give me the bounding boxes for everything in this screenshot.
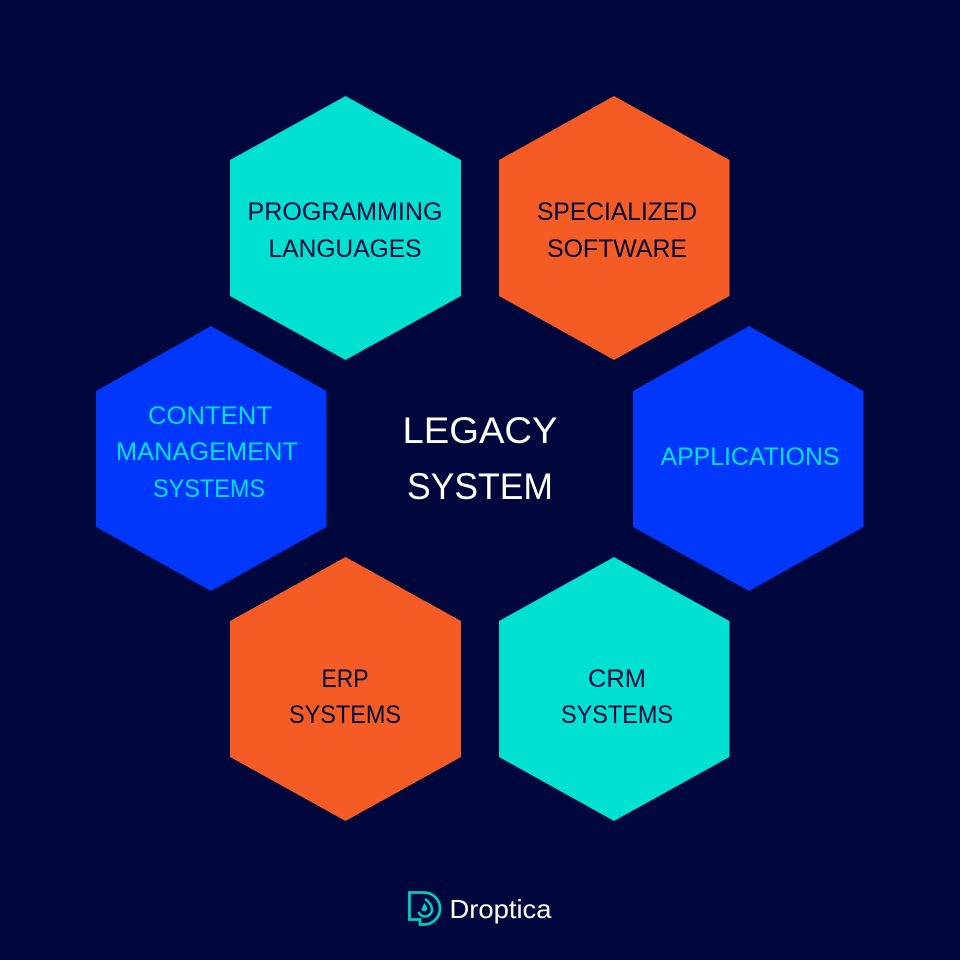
hexagon: specialized software: SPECIALIZED xyxy=(537,198,697,226)
hexagon: content management systems: CONTENT xyxy=(148,402,272,430)
hexagon: erp systems: SYSTEMS xyxy=(289,701,401,729)
hexagon: crm systems xyxy=(499,557,730,821)
logo: Droptica xyxy=(410,892,552,924)
hexagon: programming languages: PROGRAMMING xyxy=(248,198,442,226)
icon: droplet D mark xyxy=(410,892,440,924)
hexagon: programming languages: LANGUAGES xyxy=(268,235,422,263)
hexagon: specialized software: SOFTWARE xyxy=(547,235,687,263)
hexagon: applications: APPLICATIONS xyxy=(660,443,840,471)
hexagon: crm systems: SYSTEMS xyxy=(561,701,673,729)
hexagon: erp systems: ERP xyxy=(322,665,368,693)
hexagon: content management systems: SYSTEMS xyxy=(153,475,265,503)
hexagon: content management systems: MANAGEMENT xyxy=(116,438,298,466)
hexagon: content management systems xyxy=(96,326,326,591)
center title xyxy=(402,410,558,507)
wordmark: Droptica xyxy=(450,894,552,924)
hexagon: specialized software xyxy=(499,96,730,360)
center title: LEGACY xyxy=(402,410,558,451)
hexagon: applications xyxy=(633,326,864,591)
center title: SYSTEM xyxy=(407,466,553,507)
hexagon: programming languages xyxy=(230,96,461,360)
hexagon: erp systems xyxy=(230,557,461,821)
hexagon: crm systems: CRM xyxy=(588,665,646,693)
